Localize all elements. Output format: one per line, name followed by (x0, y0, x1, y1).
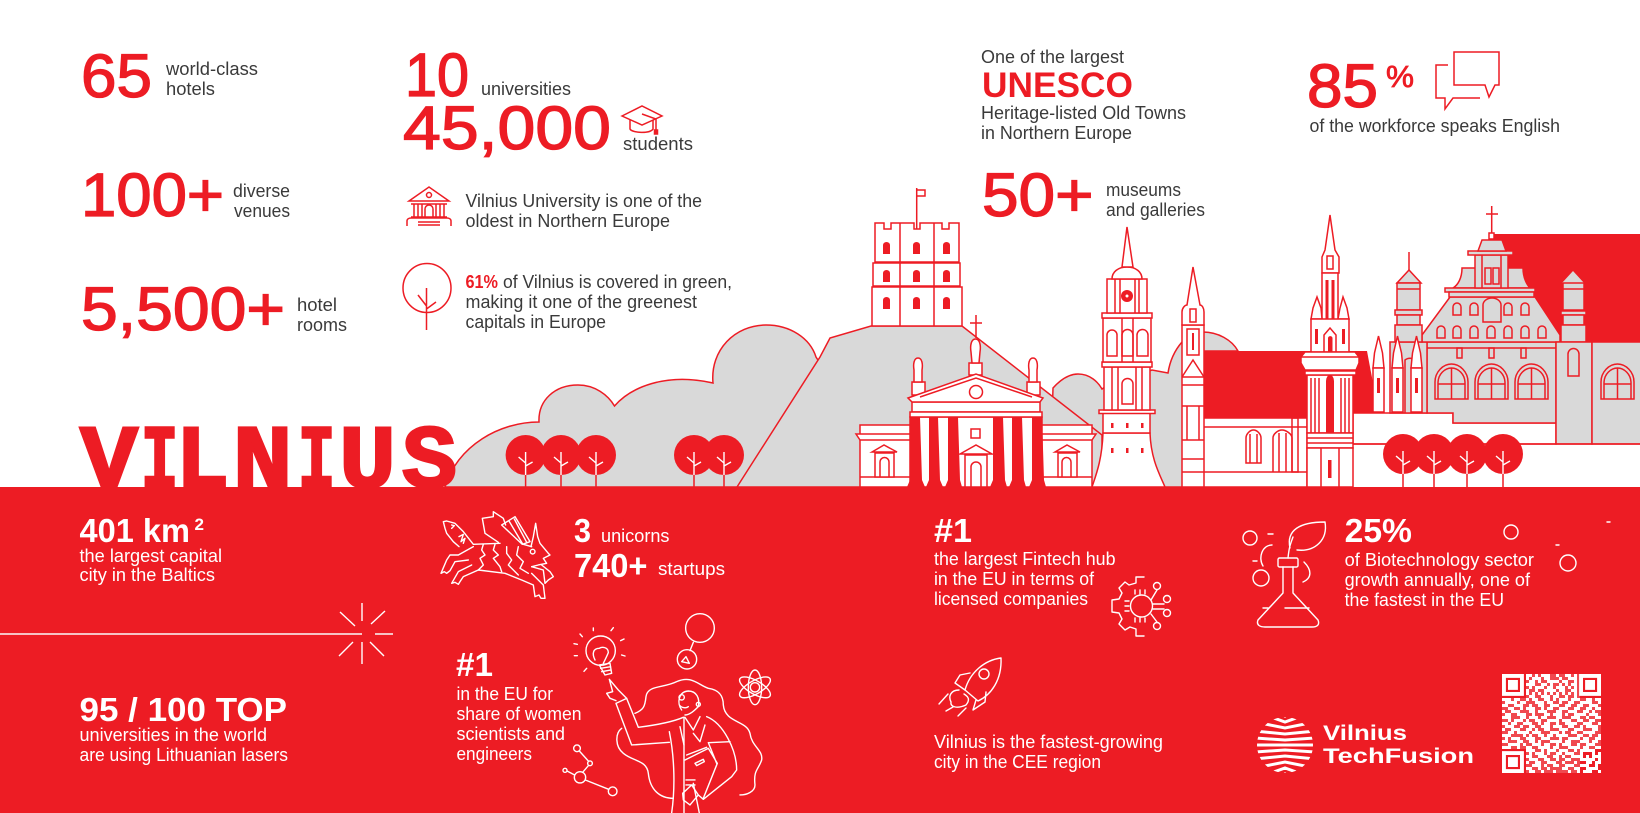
stat: 401 km2: 2 (194, 515, 204, 534)
illustration: woman scientist (563, 614, 773, 813)
stat: #1 fintech (934, 512, 1116, 609)
stat: 50+ museums: 50+ (982, 161, 1094, 229)
stat: 45,000 students: students (623, 134, 693, 154)
stat: 85% english (1307, 52, 1560, 136)
stat: 401 km2 (80, 512, 222, 585)
stat: 85% english: of the workforce speaks English (1310, 116, 1560, 136)
bell tower (1092, 227, 1165, 487)
right gray buildings (1556, 342, 1640, 444)
title: Vilnius: I (141, 413, 179, 515)
text: 61% green: capitals in Europe (466, 312, 606, 332)
red lower band (0, 487, 1640, 813)
small gothic pinnacles (1373, 336, 1422, 412)
hill dome behind church (1203, 332, 1238, 351)
title: Vilnius: N (233, 413, 293, 515)
stat: unicorns and startups: 740+ (574, 547, 648, 584)
text: fastest growing: Vilnius is the fastest-growing (934, 732, 1163, 752)
stat: 45,000 students: 45,000 (403, 94, 611, 162)
stat: 95/100 top (80, 691, 288, 765)
stat: 50+ museums (982, 161, 1205, 229)
stat: #1 fintech: the largest Fintech hub (934, 549, 1116, 569)
small tower right (1561, 271, 1586, 342)
text: Vilnius University (466, 191, 702, 231)
stat: #1 women scientists (456, 646, 582, 764)
stat: 50+ museums: and galleries (1106, 200, 1205, 220)
title: Vilnius: L (175, 413, 229, 515)
text: 61% green: making it one of the greenest (466, 292, 697, 312)
title: Vilnius: U (339, 413, 396, 515)
stat: 95/100 top: universities in the world (80, 725, 267, 745)
logo: Vilnius TechFusion: Vilnius (1323, 722, 1407, 745)
stat: 10 universities: universities (481, 79, 571, 99)
title: Vilnius: S (402, 413, 457, 515)
trees right group (1383, 434, 1523, 487)
stat: 10 universities (405, 41, 571, 109)
stat: unicorns and startups (574, 512, 725, 584)
text: UNESCO heritage: One of the largest (981, 47, 1124, 67)
stat: 5,500+ rooms: hotel (297, 295, 337, 315)
stat: 50+ museums: museums (1106, 180, 1181, 200)
icon: flask with leaf (1243, 522, 1610, 627)
text: fastest growing (934, 732, 1163, 772)
stat: 45,000 students (403, 94, 693, 162)
text: UNESCO heritage: UNESCO (982, 66, 1133, 105)
stat: 25% biotech: the fastest in the EU (1345, 590, 1504, 610)
large gray building (1390, 206, 1560, 423)
gothic tower (1301, 215, 1359, 487)
stat: 65 hotels: world-class (165, 59, 258, 79)
stat: #1 women scientists: scientists and (456, 724, 565, 744)
stat: 65 hotels (81, 42, 258, 110)
stat: 401 km2: city in the Baltics (80, 565, 215, 585)
hills left (445, 325, 900, 487)
title: Vilnius: V (80, 413, 138, 515)
stat: 100+ venues (81, 161, 290, 229)
text: 61% green: 61% (466, 272, 498, 292)
stat: 100+ venues: 100+ (81, 161, 224, 229)
stat: 5,500+ rooms: rooms (297, 315, 347, 335)
stat: 95/100 top: are using Lithuanian lasers (80, 745, 288, 765)
icon: speech bubbles (1436, 52, 1499, 109)
white church (1203, 418, 1307, 487)
text: 61% green (466, 272, 732, 332)
stat: 100+ venues: diverse (233, 181, 290, 201)
stat: #1 women scientists: engineers (456, 744, 532, 764)
stat: #1 fintech: #1 (934, 512, 972, 549)
hills behind right (1050, 342, 1204, 487)
stat: 25% biotech: 25% (1345, 512, 1412, 549)
stat: #1 fintech: licensed companies (934, 589, 1088, 609)
castle hill (737, 326, 1102, 487)
logo: Vilnius TechFusion: TechFusion (1323, 745, 1474, 768)
stat: 85% english: % (1386, 59, 1414, 94)
small tower left (1395, 252, 1422, 342)
red church roof (1203, 351, 1380, 420)
stat: 25% biotech: of Biotechnology sector (1345, 550, 1534, 570)
stat: 5,500+ rooms: 5,500+ (81, 275, 285, 343)
stat: 401 km2: 401 km (80, 512, 190, 549)
icon: graduation cap (622, 106, 662, 134)
stat: 10 universities: 10 (405, 41, 469, 109)
stat: unicorns and startups: startups (658, 559, 725, 579)
ground line right (1353, 443, 1640, 445)
gediminas tower (872, 188, 962, 326)
title: Vilnius: I (298, 413, 336, 515)
stat: 25% biotech: growth annually, one of (1345, 570, 1531, 590)
text: UNESCO heritage (981, 47, 1186, 143)
stat: 25% biotech (1345, 512, 1534, 610)
text: UNESCO heritage: in Northern Europe (981, 123, 1132, 143)
text: UNESCO heritage: Heritage-listed Old Towns (981, 103, 1186, 123)
icon: university building (407, 187, 451, 226)
QR code (1502, 674, 1601, 773)
stat: 401 km2: the largest capital (80, 546, 222, 566)
laser beam with sparks (0, 603, 393, 664)
icon: rocket (939, 658, 1001, 716)
icon: gear circuit (1112, 577, 1170, 636)
text: 61% green: of Vilnius is covered in green, (503, 272, 732, 292)
white block base (1353, 413, 1556, 444)
icon: winged dragon (441, 512, 553, 598)
stat: #1 women scientists: in the EU for (456, 684, 553, 704)
stat: unicorns and startups: unicorns (601, 526, 670, 546)
stat: 65 hotels: 65 (81, 42, 152, 110)
stat: 65 hotels: hotels (166, 79, 215, 99)
text: Vilnius University: Vilnius University is one of the (466, 191, 702, 211)
panel: skyline (445, 188, 1640, 487)
narrow tower (1182, 267, 1204, 487)
logo: Vilnius TechFusion (1257, 717, 1472, 773)
stat: 85% english: 85 (1307, 52, 1378, 120)
trees left group (506, 435, 744, 487)
text: fastest growing: city in the CEE region (934, 752, 1101, 772)
cathedral (856, 315, 1096, 487)
stat: #1 women scientists: #1 (456, 646, 493, 683)
stat: #1 women scientists: share of women (456, 704, 582, 724)
stat: unicorns and startups: 3 (574, 512, 591, 549)
text: Vilnius University: oldest in Northern Europe (466, 211, 670, 231)
stat: #1 fintech: in the EU in terms of (934, 569, 1095, 589)
stat: 100+ venues: venues (234, 201, 290, 221)
red roof behind town hall (1490, 234, 1640, 342)
icon: tree outline (403, 264, 451, 330)
stat: 95/100 top: 95 / 100 TOP (80, 691, 287, 728)
